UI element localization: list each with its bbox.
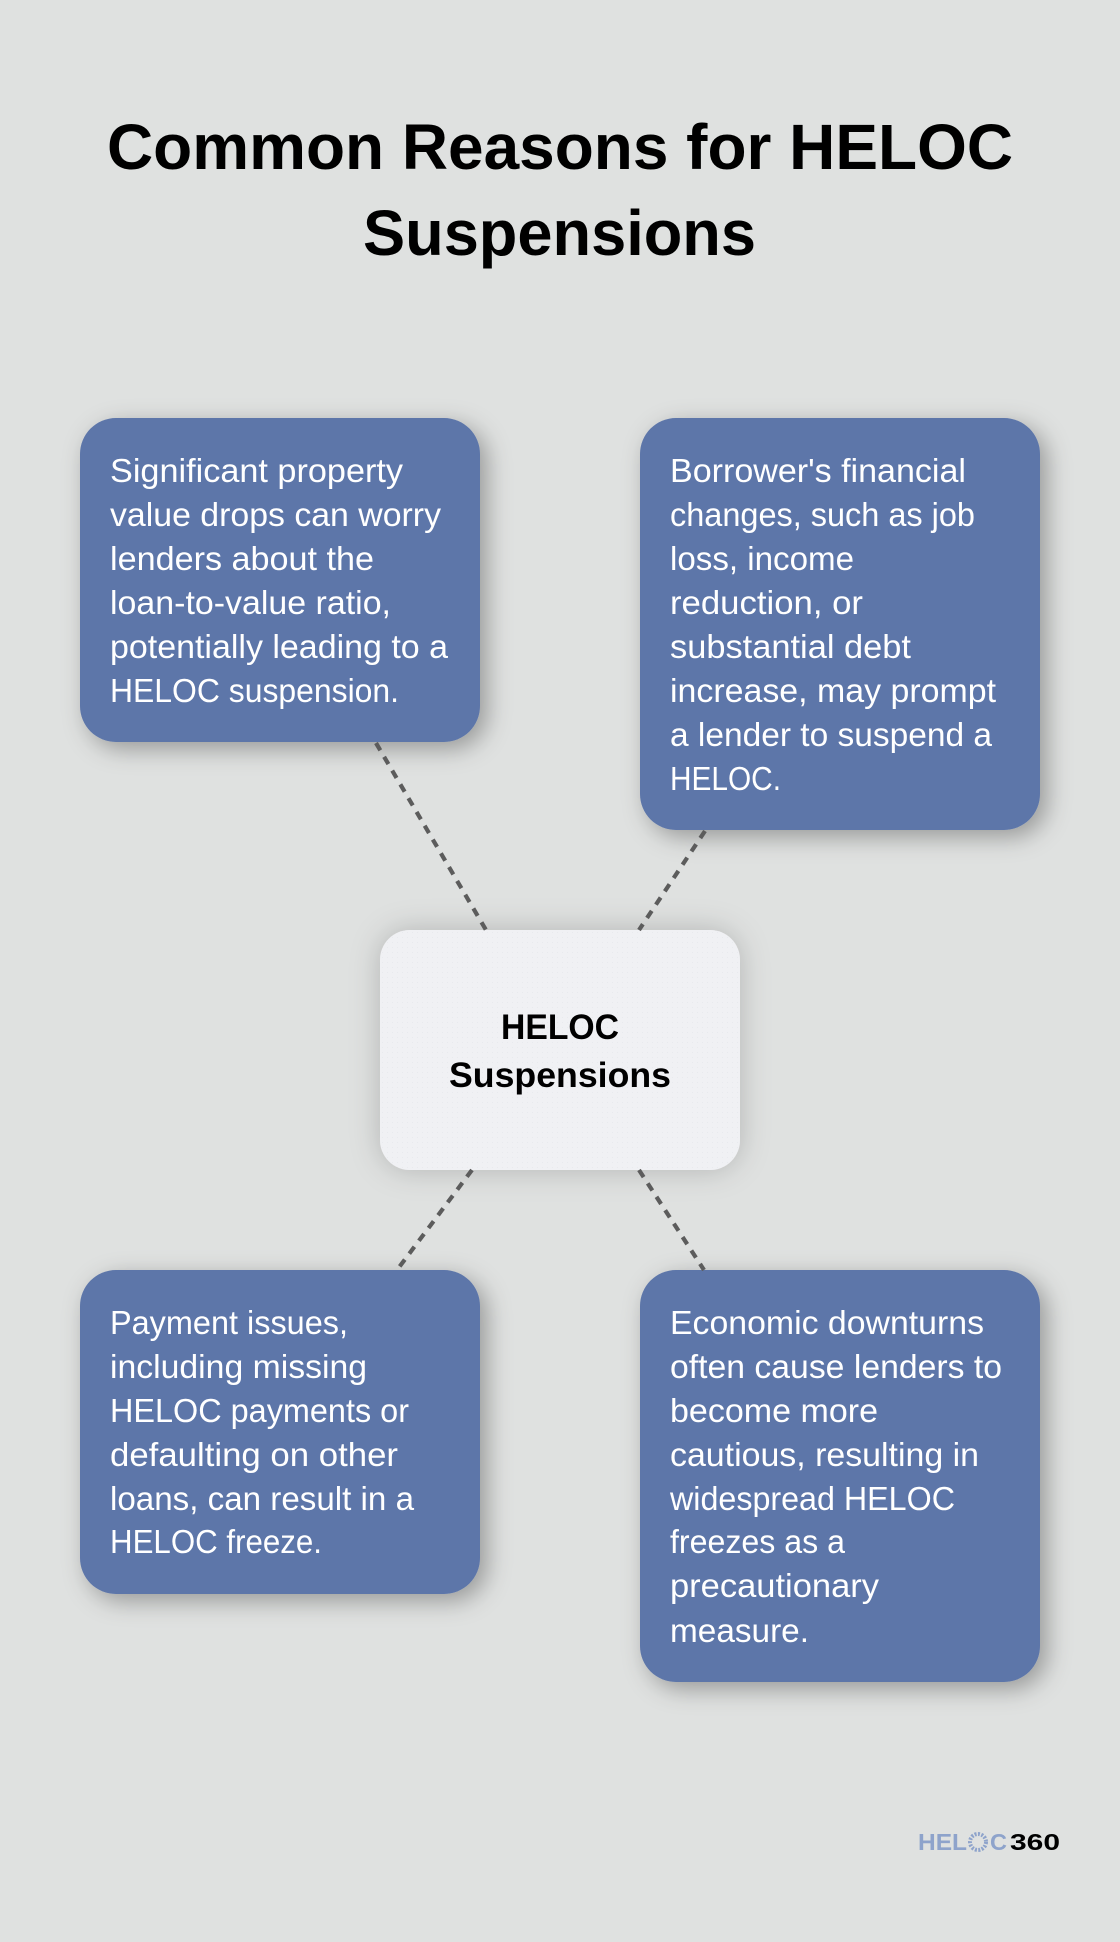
- panel: borrower financial changes: reduction, or: [670, 584, 863, 621]
- title: Common Reasons for HELOC: [107, 111, 1013, 183]
- panel: borrower financial changes: a lender to suspend a: [670, 716, 993, 753]
- panel: payment issues: Payment issues,: [110, 1304, 348, 1341]
- panel: property value drops: HELOC suspension.: [110, 672, 399, 709]
- panel: borrower financial changes: Borrower's financial: [670, 452, 966, 489]
- logo: HELOC360: C: [990, 1829, 1007, 1855]
- panel: payment issues: [80, 1270, 480, 1594]
- panel: economic downturns: widespread HELOC: [669, 1480, 955, 1517]
- panel: borrower financial changes: loss, income: [670, 540, 854, 577]
- panel: borrower financial changes: [640, 418, 1040, 830]
- connector: bottom right: [639, 1170, 704, 1270]
- panel: property value drops: lenders about the: [110, 540, 374, 577]
- panel: property value drops: loan-to-value ratio,: [110, 584, 391, 621]
- panel: economic downturns: Economic downturns: [670, 1304, 984, 1341]
- panel: payment issues: defaulting on other: [110, 1436, 398, 1473]
- title: [107, 111, 1013, 269]
- panel: central hub: [380, 930, 740, 1170]
- panel: borrower financial changes: changes, such as job: [670, 496, 975, 533]
- panel: economic downturns: often cause lenders to: [670, 1348, 1002, 1385]
- panel: borrower financial changes: increase, may prompt: [670, 672, 996, 709]
- panel: central hub: Suspensions: [449, 1056, 671, 1095]
- logo: HELOC360: [918, 1829, 1060, 1855]
- panel: borrower financial changes: HELOC.: [670, 760, 781, 797]
- connector: top left: [376, 743, 486, 930]
- panel: economic downturns: precautionary: [670, 1567, 880, 1604]
- panel: property value drops: value drops can worry: [110, 496, 441, 533]
- panel: property value drops: [80, 418, 480, 742]
- panel: borrower financial changes: substantial debt: [670, 628, 911, 665]
- panel: payment issues: HELOC payments or: [110, 1392, 409, 1429]
- panel: payment issues: HELOC freeze.: [110, 1523, 322, 1560]
- panel: property value drops: potentially leading to a: [110, 628, 449, 665]
- panel: payment issues: including missing: [110, 1348, 367, 1385]
- panel: payment issues: loans, can result in a: [110, 1480, 415, 1517]
- logo: HELOC360: 360: [1010, 1829, 1060, 1855]
- panel: property value drops: Significant property: [110, 452, 404, 489]
- panel: economic downturns: [640, 1270, 1040, 1682]
- panel: central hub: HELOC: [501, 1008, 619, 1047]
- panel: economic downturns: cautious, resulting in: [670, 1436, 979, 1473]
- panel: economic downturns: become more: [670, 1392, 878, 1429]
- panel: economic downturns: freezes as a: [670, 1523, 846, 1560]
- logo: HELOC360: HEL: [918, 1829, 967, 1855]
- connector: top right: [639, 831, 705, 930]
- connector: bottom left: [397, 1170, 472, 1270]
- panel: economic downturns: measure.: [670, 1612, 809, 1649]
- title: Suspensions: [363, 197, 756, 269]
